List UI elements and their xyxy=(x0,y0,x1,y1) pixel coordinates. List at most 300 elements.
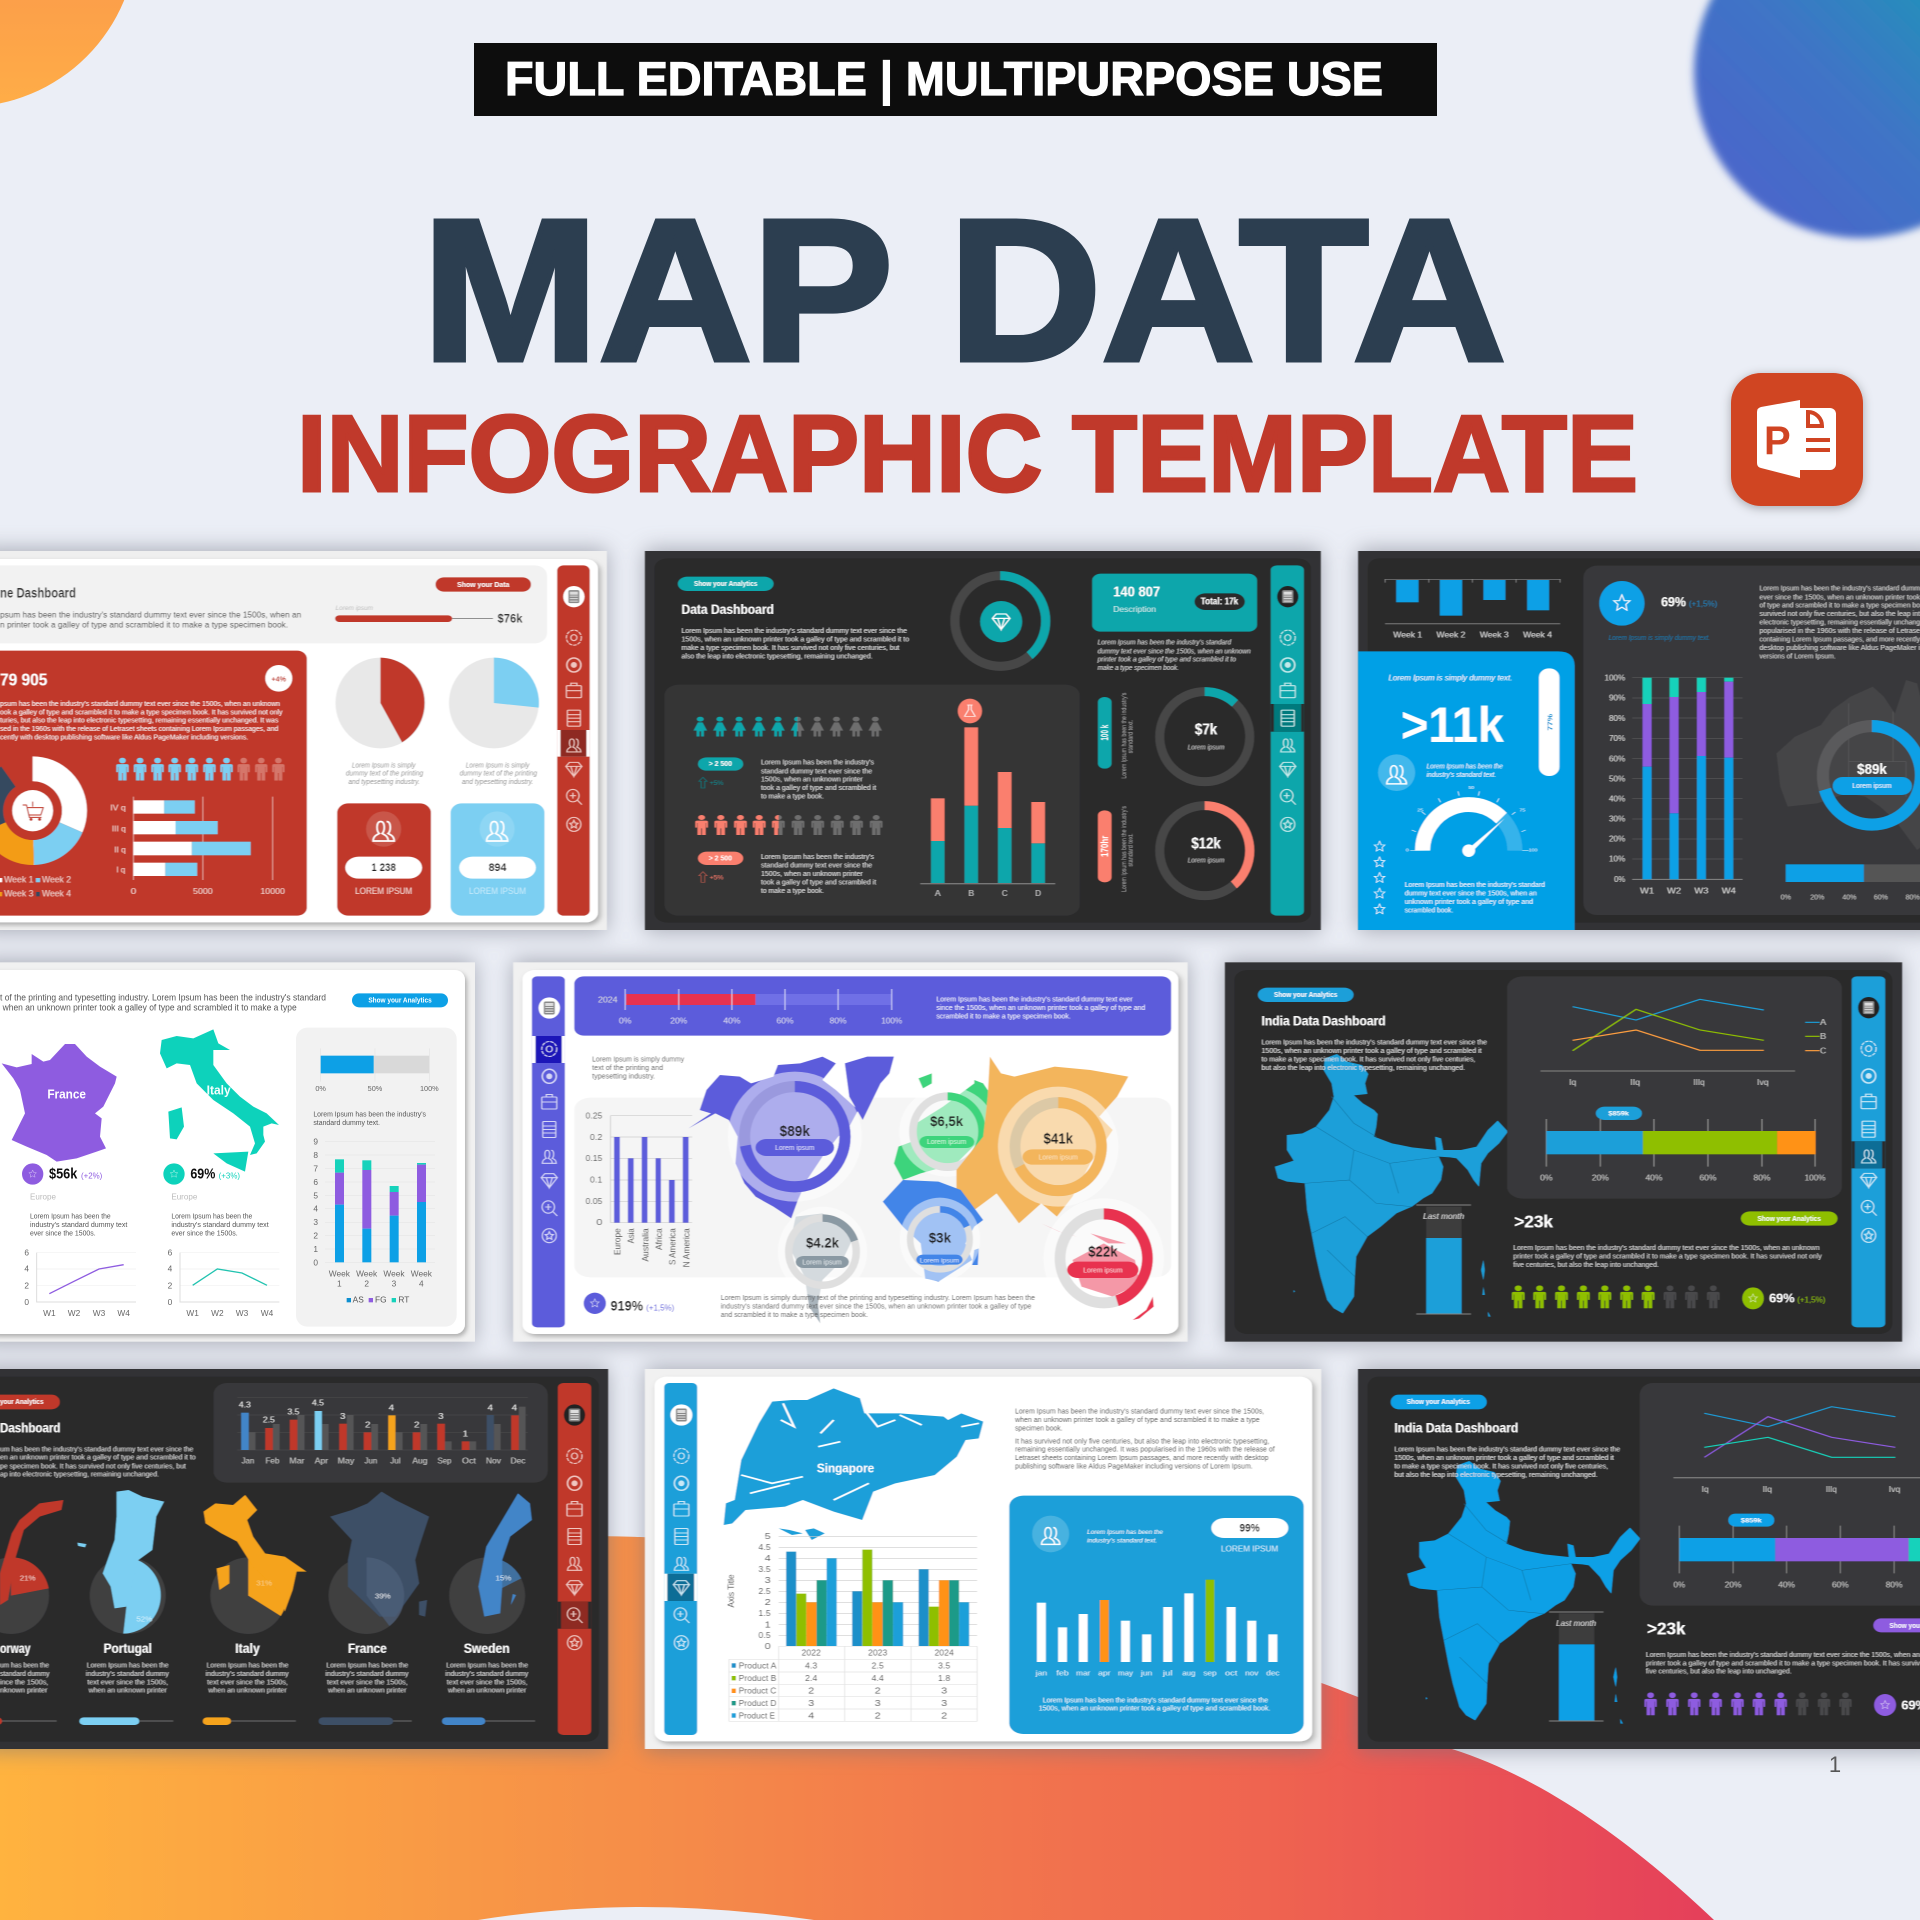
grey chart panel: 4 xyxy=(419,1278,424,1288)
blue highlight card: unknown printer took a galley of type and xyxy=(1405,897,1533,906)
country: portugal: when an unknown printer xyxy=(88,1686,167,1694)
grouped bar chart: 5 xyxy=(765,1532,771,1542)
sidebar xyxy=(557,565,590,916)
pie chart red: and typesetting industry. xyxy=(348,778,420,786)
donut 7k: Lorem ipsum xyxy=(1188,743,1224,751)
header text: also the leap into electronic typesetting, remaining unchanged. xyxy=(682,652,873,660)
grey chart panel: Iq xyxy=(1702,1484,1709,1494)
stat card blue: 894 xyxy=(489,861,507,874)
grey chart panel: $859k xyxy=(1741,1518,1762,1524)
grouped bar chart: 3.5 xyxy=(758,1565,771,1575)
blue monthly card: jun xyxy=(1140,1669,1152,1677)
blue highlight card: industry's standard text. xyxy=(1427,770,1496,779)
grey chart panel: 0 xyxy=(313,1257,318,1267)
header text: India Data Dashboard xyxy=(1262,1013,1386,1029)
pie chart blue: Lorem Ipsum is simply xyxy=(466,761,530,769)
panel: world map xyxy=(513,962,1188,1342)
monthly bar chart: 4.3 xyxy=(239,1400,251,1409)
salmon stat: Lorem Ipsum has been the industry's xyxy=(761,852,874,861)
grey band xyxy=(574,1098,1171,1277)
map: australia: $22k xyxy=(1088,1244,1118,1260)
grey chart panel: Ivq xyxy=(1757,1078,1769,1088)
donut 89k: $89k xyxy=(1857,762,1887,778)
sidebar xyxy=(558,1383,591,1735)
country: norway: orway xyxy=(0,1641,31,1657)
monthly bar chart: 2.5 xyxy=(263,1415,275,1424)
icon: powerpoint xyxy=(1731,373,1863,506)
gauge: 50 xyxy=(1468,785,1474,791)
stacked percent chart: W1 xyxy=(1640,886,1654,895)
gauge xyxy=(1406,785,1538,857)
header text: Data Dashboard xyxy=(682,602,774,617)
salmon stat: > 2 500 xyxy=(709,854,732,862)
bar chart: 0.2 xyxy=(590,1133,602,1143)
progress bar: 20% xyxy=(1810,893,1824,901)
banner: FULL EDITABLE | MULTIPURPOSE USE xyxy=(505,52,1383,105)
banner xyxy=(474,43,1437,116)
grey chart panel xyxy=(1640,1383,1920,1606)
stat: italy: industry's standard dummy text xyxy=(171,1220,269,1229)
vertical pill 170hr xyxy=(1098,806,1135,892)
grey chart panel: Ivq xyxy=(1889,1484,1900,1494)
horizontal bar chart: 5000 xyxy=(193,887,213,896)
grey chart panel: 80% xyxy=(1886,1580,1903,1589)
intro text xyxy=(592,1055,685,1080)
country: norway: ince the 1500s, xyxy=(0,1678,48,1686)
salmon stat: +5% xyxy=(710,873,723,881)
line chart: france xyxy=(24,1247,136,1318)
header text xyxy=(1258,988,1487,1072)
header: Show your Analytics xyxy=(368,998,432,1005)
paragraph: remaining essentially unchanged. It was popularised in the 1960s with the release of xyxy=(1015,1445,1275,1453)
pie chart red: dummy text of the printing xyxy=(346,769,424,777)
pie chart blue xyxy=(449,658,539,786)
inner grey panel xyxy=(665,685,1080,916)
gauge: 100 xyxy=(1529,848,1538,854)
people row xyxy=(1645,1692,1851,1715)
stacked percent chart: 80% xyxy=(1609,713,1625,723)
red main card: psum has been the industry's standard dummy text ever since the 1500s, when an unknown xyxy=(0,700,280,708)
stacked bar chart: B xyxy=(968,889,974,899)
stacked bar chart xyxy=(920,699,1055,899)
italic text: printer took a galley of type and scrambled it to xyxy=(1097,655,1236,663)
header: t of the printing and typesetting industry. Lorem Ipsum has been the industry's standard xyxy=(0,992,326,1002)
country: france: text ever since the 1500s, xyxy=(327,1678,408,1686)
map: singapore xyxy=(724,1388,983,1540)
right grey panel: 69% xyxy=(1661,595,1686,610)
stacked percent chart: 50% xyxy=(1609,774,1625,784)
grouped bar chart: 0.5 xyxy=(758,1631,771,1641)
monthly bar chart: Oct xyxy=(462,1456,476,1465)
map: africa: $3k xyxy=(929,1231,951,1246)
grey chart panel: 50% xyxy=(368,1084,383,1093)
stat 23k xyxy=(1646,1618,1920,1676)
data table: 4 xyxy=(808,1711,815,1721)
paragraph: when an unknown printer took a galley of type and scrambled it to make a type xyxy=(1014,1415,1260,1424)
country: france: 39% xyxy=(375,1591,391,1600)
top progress bar: 80% xyxy=(830,1017,847,1026)
header text: 1500s, when an unknown printer took a galley of type and scrambled it to xyxy=(682,635,909,643)
country: portugal: 52% xyxy=(136,1614,153,1623)
monthly bar chart: 4 xyxy=(512,1403,517,1412)
total card xyxy=(1092,574,1257,632)
monthly bar chart: 4.5 xyxy=(312,1398,324,1407)
weekly bars: Week 3 xyxy=(1480,630,1509,640)
grey chart panel: 3 xyxy=(313,1217,318,1227)
paragraph: specimen book. xyxy=(1015,1424,1063,1432)
country: italy: industry's standard dummy xyxy=(206,1670,289,1678)
total card: Total: 17k xyxy=(1201,597,1239,607)
top progress bar: 20% xyxy=(670,1017,688,1026)
stacked percent chart: 30% xyxy=(1609,814,1625,824)
total card: 140 807 xyxy=(1113,583,1160,600)
grouped bar chart: 1 xyxy=(765,1621,771,1630)
vertical pill 170hr: 170hr xyxy=(1099,835,1110,857)
header text: your Analytics xyxy=(0,1398,44,1406)
map: north america: $89k xyxy=(780,1123,810,1139)
blue highlight card: dummy text ever since the 1500s, when an xyxy=(1405,889,1537,898)
map: australia: Lorem ipsum xyxy=(1083,1266,1123,1274)
gauge: 0 xyxy=(1406,848,1409,854)
progress bar: 40% xyxy=(1842,893,1857,901)
monthly bar chart: 2 xyxy=(414,1420,420,1429)
stat: france: Lorem Ipsum has been the xyxy=(30,1211,111,1220)
map: north america xyxy=(689,1057,894,1218)
australia map xyxy=(1777,680,1920,850)
monthly bar chart: Mar xyxy=(289,1456,305,1465)
grey chart panel: 0% xyxy=(315,1084,326,1093)
vertical pill 100k: 100 k xyxy=(1099,725,1110,741)
teal stat: +5% xyxy=(710,779,723,787)
data table: 2.5 xyxy=(872,1661,884,1671)
stacked percent chart: 70% xyxy=(1609,733,1625,743)
stacked percent chart: W3 xyxy=(1694,886,1708,895)
grey chart panel: IIIq xyxy=(1826,1484,1837,1494)
blue highlight card: >11k xyxy=(1401,698,1504,753)
donut 89k xyxy=(1823,726,1920,825)
map: south america: $4.2k xyxy=(806,1236,839,1251)
monthly bar chart: Aug xyxy=(412,1456,428,1465)
blue highlight card xyxy=(1358,651,1575,930)
grey chart panel: 6 xyxy=(313,1177,318,1187)
sidebar xyxy=(532,976,565,1327)
sidebar xyxy=(664,1383,697,1735)
top progress bar: 40% xyxy=(723,1017,741,1026)
country: norway xyxy=(0,1500,63,1725)
data table: 3 xyxy=(941,1699,947,1709)
header xyxy=(0,992,448,1012)
vertical pill 100k xyxy=(1098,693,1135,779)
grey chart panel: 4 xyxy=(313,1204,318,1214)
panel: teal data dashboard xyxy=(645,551,1321,930)
data table: 2.4 xyxy=(805,1674,818,1684)
horizontal bar chart: III q xyxy=(112,824,126,833)
map: north america: Lorem ipsum xyxy=(775,1144,815,1152)
header text: India Data Dashboard xyxy=(1394,1421,1518,1436)
stat: italy: (+3%) xyxy=(219,1170,240,1180)
blue monthly card: 99% xyxy=(1239,1521,1260,1534)
stars xyxy=(1374,841,1385,914)
blue monthly card: jan xyxy=(1035,1669,1047,1677)
map: africa: Lorem ipsum xyxy=(920,1256,959,1264)
country: france: Lorem Ipsum has been the xyxy=(326,1661,409,1669)
pie chart blue: and typesetting industry. xyxy=(462,778,533,786)
grey chart panel: IIq xyxy=(1763,1484,1772,1494)
grey chart panel: 2 xyxy=(313,1231,318,1241)
panel: india dashboard green xyxy=(1225,962,1902,1342)
blue monthly card: jul xyxy=(1162,1669,1173,1677)
monthly bar chart: Sep xyxy=(438,1456,451,1465)
grey chart panel: C xyxy=(1820,1047,1826,1056)
title: MAP DATA xyxy=(422,177,1506,403)
stacked bar chart: D xyxy=(1035,889,1041,899)
footer stat and text: Lorem Ipsum is simply dummy text of the printing and typesetting industry. Lorem Ipsum has been the xyxy=(721,1293,1035,1302)
stat: italy xyxy=(163,1163,269,1237)
header text: make a type specimen book. It has survived not only five centuries, but xyxy=(682,643,900,652)
gauge: 25 xyxy=(1417,808,1423,814)
country: italy: text ever since the 1500s, xyxy=(207,1678,288,1686)
monthly bar chart xyxy=(214,1383,548,1483)
grey chart panel: 5 xyxy=(313,1190,318,1200)
header box: ne Dashboard xyxy=(0,586,76,601)
top progress bar xyxy=(574,976,1171,1036)
country: portugal: Lorem Ipsum has been the xyxy=(87,1661,169,1669)
teal stat: > 2 500 xyxy=(709,759,732,768)
line chart: italy: W2 xyxy=(211,1308,224,1318)
stat 23k: Show your Analytics xyxy=(1758,1214,1821,1223)
grey chart panel: 1 xyxy=(313,1244,318,1254)
teal stat xyxy=(698,757,877,800)
header box: n printer took a galley of type and scrambled it to make a type specimen book. xyxy=(0,620,288,630)
data table: Product E xyxy=(739,1711,775,1721)
header text: ap into electronic typesetting, remaining unchanged. xyxy=(0,1470,159,1478)
total card: Description xyxy=(1113,605,1156,615)
monthly bar chart: 1 xyxy=(463,1429,468,1438)
legend xyxy=(0,876,71,899)
map: asia xyxy=(956,1057,1128,1223)
country: portugal: text ever since the 1500s, xyxy=(87,1678,168,1686)
pie chart red xyxy=(336,658,425,786)
line chart: france: W4 xyxy=(117,1308,130,1318)
grey chart panel: 8 xyxy=(313,1150,318,1160)
line chart: italy: 4 xyxy=(168,1264,173,1274)
line chart: italy: 0 xyxy=(168,1297,173,1307)
intro text: text of the printing and xyxy=(592,1063,663,1072)
donut chart xyxy=(0,769,74,853)
map: india xyxy=(1407,1461,1640,1724)
data table: 4.4 xyxy=(872,1674,884,1684)
grouped bar chart: 3 xyxy=(765,1576,771,1586)
donut 12k: $12k xyxy=(1191,834,1221,852)
footer stat and text: 919% xyxy=(610,1299,643,1314)
blue monthly card: LOREM IPSUM xyxy=(1221,1545,1278,1554)
paragraph: Letraset sheets containing Lorem Ipsum passages, and more recently with desktop xyxy=(1015,1453,1269,1462)
grey chart panel: FG xyxy=(375,1295,387,1305)
last month bar: Last month xyxy=(1556,1618,1596,1628)
grouped bar chart: 2 xyxy=(765,1598,771,1608)
weekly bars: Week 1 xyxy=(1393,630,1422,640)
red main card: ook a galley of type and scrambled it to make a type specimen book. It has survived not only xyxy=(0,708,283,716)
data table: Product C xyxy=(739,1687,776,1696)
blue monthly card: aug xyxy=(1182,1669,1195,1677)
data table xyxy=(729,1646,977,1721)
grey chart panel: 20% xyxy=(1592,1174,1609,1183)
header text: 1500s, when an unknown printer took a galley of type and scrambled it xyxy=(1394,1453,1615,1462)
grey chart panel: AS xyxy=(353,1295,364,1305)
salmon stat xyxy=(698,852,877,895)
panel: blue australia dashboard xyxy=(1358,551,1920,930)
blue monthly card: oct xyxy=(1225,1669,1238,1677)
grey chart panel: B xyxy=(1820,1032,1826,1042)
monthly bar chart: Apr xyxy=(315,1456,328,1465)
stat card blue: LOREM IPSUM xyxy=(469,887,526,897)
pie chart red: Lorem Ipsum is simply xyxy=(352,761,416,769)
line chart: france: 6 xyxy=(24,1247,29,1257)
grouped bar chart: 1.5 xyxy=(758,1609,771,1619)
grey chart panel: RT xyxy=(398,1295,409,1305)
data table: Product A xyxy=(739,1661,777,1671)
grey chart panel: 80% xyxy=(1753,1174,1771,1183)
stat 69%: (+1,5%) xyxy=(1797,1296,1825,1305)
grouped bar chart xyxy=(726,1532,977,1652)
country: sweden: Sweden xyxy=(464,1641,510,1657)
footer stat and text xyxy=(584,1293,1035,1319)
header box: $76k xyxy=(498,612,523,625)
vertical pill 170hr: standard text. xyxy=(1128,833,1135,867)
horizontal bar chart: II q xyxy=(114,845,126,854)
data table: 3.5 xyxy=(938,1661,951,1671)
teal stat: to make a type book. xyxy=(761,792,824,800)
data table: 2022 xyxy=(802,1649,821,1658)
blue highlight card: Lorem Ipsum is simply dummy text. xyxy=(1388,673,1512,683)
stat card blue xyxy=(451,803,544,916)
line chart: france: 0 xyxy=(24,1297,29,1307)
stat card red: 1 238 xyxy=(371,861,396,874)
stat: france: Europe xyxy=(30,1191,56,1201)
header text xyxy=(678,577,909,660)
blue highlight card: Lorem Ipsum has been the xyxy=(1427,762,1503,771)
salmon stat: to make a type book. xyxy=(761,886,824,895)
data table: 2 xyxy=(875,1687,881,1696)
grey chart panel: 3 xyxy=(392,1278,397,1288)
blue highlight card: Lorem Ipsum has been the industry's standard xyxy=(1405,880,1545,889)
progress bar: 0% xyxy=(1781,893,1791,901)
header text: Lorem Ipsum has been the industry's standard dummy text ever since the xyxy=(682,626,907,635)
grey chart panel: Iq xyxy=(1569,1078,1576,1088)
top progress bar: scrambled it to make a type specimen book. xyxy=(936,1012,1071,1020)
right grey panel xyxy=(1583,566,1920,915)
header text: to make a type specimen book. It has survived not only five centuries, xyxy=(1262,1055,1475,1063)
grey chart panel: 20% xyxy=(1725,1580,1742,1589)
blue monthly card: industry's standard text. xyxy=(1087,1536,1157,1544)
page number: 1 xyxy=(1829,1752,1841,1777)
top progress bar: 100% xyxy=(881,1017,903,1026)
header text: 1500s, when an unknown printer took a galley of type and scrambled it xyxy=(1262,1046,1482,1055)
donut 7k xyxy=(1160,692,1250,782)
country: france: France xyxy=(348,1641,387,1657)
grey chart panel: IIq xyxy=(1630,1078,1640,1088)
map: asia: $41k xyxy=(1043,1131,1073,1147)
progress bar: 60% xyxy=(1874,893,1888,901)
map: singapore: Singapore xyxy=(817,1461,874,1476)
map: australia xyxy=(1041,1198,1164,1320)
people row xyxy=(1512,1285,1720,1308)
header text: Dashboard xyxy=(0,1421,60,1436)
country: norway: um has been the xyxy=(0,1661,49,1669)
country: italy: Italy xyxy=(235,1641,260,1657)
line chart: italy: W3 xyxy=(236,1308,249,1318)
data table: 3 xyxy=(875,1699,881,1709)
header box: Show your Data xyxy=(457,580,510,589)
bar chart: 0.15 xyxy=(585,1154,603,1164)
weekly bars xyxy=(1385,579,1560,640)
grouped bar chart: Axis Title xyxy=(726,1574,736,1608)
horizontal bar chart: IV q xyxy=(110,804,126,812)
blue monthly card: Lorem Ipsum has been the industry's standard dummy text ever since the xyxy=(1043,1695,1268,1704)
panel shadows xyxy=(0,549,1920,1751)
line chart: france: W2 xyxy=(68,1308,81,1318)
data table: 2023 xyxy=(868,1649,887,1658)
grey chart panel: Week xyxy=(329,1268,351,1278)
header text: to make a type specimen book. It has survived not only five centuries, xyxy=(1394,1462,1608,1471)
stacked percent chart: W2 xyxy=(1667,886,1681,895)
blue monthly card: Lorem Ipsum has been the xyxy=(1087,1528,1163,1536)
grey chart panel: 2 xyxy=(364,1278,369,1288)
header box: Lorem ipsum xyxy=(336,604,373,612)
header text: but also the leap into electronic typesetting, remaining unchanged. xyxy=(1394,1470,1598,1479)
teal stat: standard dummy text ever since the xyxy=(761,767,872,775)
grey chart panel: 0% xyxy=(1540,1174,1553,1183)
intro text: Lorem Ipsum is simply dummy xyxy=(592,1055,685,1063)
header text xyxy=(0,1395,196,1478)
stat 23k: >23k xyxy=(1647,1619,1686,1638)
salmon stat: 1500s, when an unknown printer xyxy=(761,869,863,878)
country: france xyxy=(319,1492,429,1725)
footer stat and text: and scrambled it to make a type specimen book. xyxy=(721,1310,868,1319)
red main card: cently with desktop publishing software like Aldus PageMaker including versions. xyxy=(0,733,248,741)
sidebar xyxy=(1271,565,1304,916)
progress bar xyxy=(1781,864,1920,901)
header text: Lorem Ipsum has been the industry's standard dummy text ever since the xyxy=(1394,1445,1620,1454)
blue monthly card xyxy=(1009,1496,1304,1734)
top progress bar: 0% xyxy=(619,1017,632,1026)
grey chart panel xyxy=(296,1028,457,1327)
map: europe xyxy=(894,1073,996,1180)
country: italy: Lorem Ipsum has been the xyxy=(207,1661,289,1669)
vertical pill 100k: Lorem Ipsum has been the industry's xyxy=(1122,693,1128,779)
country: sweden: 15% xyxy=(495,1573,512,1582)
grey chart panel: Week xyxy=(383,1268,405,1278)
orange corner blob xyxy=(0,0,137,107)
grey chart panel: 1 xyxy=(337,1278,342,1288)
top progress bar: 60% xyxy=(777,1017,794,1026)
map: france: France xyxy=(47,1086,86,1101)
stat 69% xyxy=(1742,1287,1825,1309)
footer stat and text: industry's standard dummy text ever since the 1500s, when an unknown printer took a galley of type xyxy=(721,1302,1032,1310)
map: europe: Lorem ipsum xyxy=(927,1138,966,1146)
weekly bars: Week 2 xyxy=(1437,630,1465,640)
grey chart panel: 0% xyxy=(1674,1580,1686,1589)
stat 23k: five centuries, but also the leap into unchanged. xyxy=(1646,1667,1792,1676)
male people row xyxy=(695,815,882,835)
grey chart panel: 40% xyxy=(1645,1174,1663,1183)
horizontal bar chart: 0 xyxy=(131,887,136,896)
top progress bar: 2024 xyxy=(598,996,618,1005)
grey chart panel: 40% xyxy=(1778,1580,1795,1589)
monthly bar chart: Jun xyxy=(365,1456,377,1465)
country: sweden: text ever since the 1500s, xyxy=(447,1678,527,1686)
grey chart panel: 60% xyxy=(1699,1174,1717,1183)
